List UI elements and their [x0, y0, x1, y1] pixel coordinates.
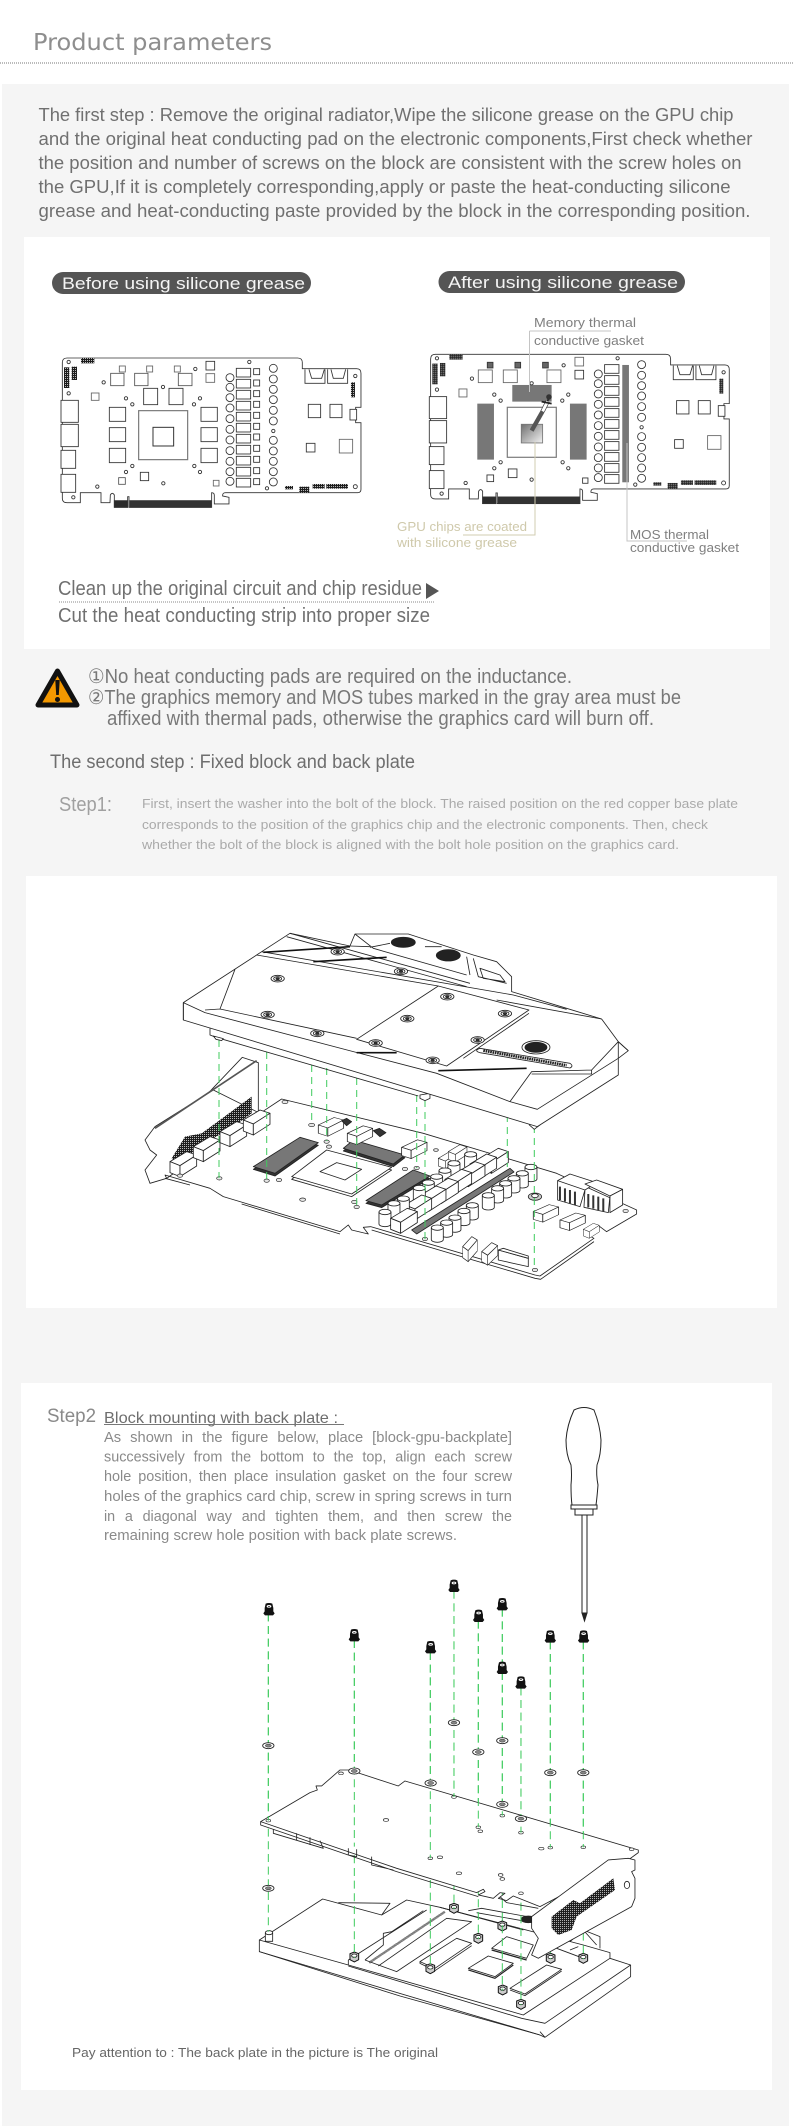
- screws: [263, 1580, 589, 1689]
- arrow: next action triangle: [426, 583, 439, 599]
- power connectors: [463, 1174, 623, 1267]
- text block: warning notes: ①No heat conducting pads are required on the inductance.: [88, 666, 572, 688]
- note: pay attention: Pay attention to : The back plate in the picture is The original: [72, 2045, 438, 2060]
- alignment guides: lower dashed lines: [268, 1591, 583, 2005]
- text block: warning notes: affixed with thermal pads, otherwise the graphics card will burn off.: [107, 708, 654, 730]
- heading: second step: The second step : Fixed block and back plate: [50, 752, 415, 773]
- text block: first step instructions: [38, 104, 752, 221]
- callout: MOS thermal conductive gasket: conductive gasket: [630, 541, 740, 555]
- GPU chip coated with grease: [521, 424, 543, 443]
- MOS and capacitor rows: [379, 1148, 537, 1242]
- callout: memory thermal conductive gasket: Memory thermal: [534, 316, 636, 330]
- thermal strip hatch: [369, 1912, 445, 1963]
- callout: GPU chips coated with silicone grease: GPU chips are coated: [397, 520, 527, 534]
- heading: Product parameters: Product parameters: [33, 30, 272, 56]
- text block: step 1 description: First, insert the washer into the bolt of the block. The raised position on the red copper base plate: [142, 796, 738, 811]
- washers: [263, 1720, 589, 1891]
- diagram: circuit board before grease: [61, 358, 361, 507]
- illustration: lower water block: [259, 1899, 631, 2037]
- callout: GPU chips coated with silicone grease: with silicone grease: [396, 536, 517, 550]
- callout: MOS thermal conductive gasket: [627, 443, 740, 555]
- board mounting holes: [177, 1100, 628, 1272]
- card surface holes: [266, 1772, 634, 1895]
- text block: step 2 instructions: As shown in the figure below, place [block-gpu-backplate]: [104, 1429, 512, 1446]
- ports: [391, 937, 550, 1054]
- text block: first step instructions: the GPU,If it is completely corresponding,apply or paste the heat-conducting silicone: [38, 176, 730, 197]
- panel: block installation illustration: [26, 876, 777, 1308]
- diagram: circuit board after grease with gaskets: [429, 354, 729, 504]
- black accent strips: [263, 947, 527, 1071]
- board outline: [165, 1099, 637, 1276]
- logo slot: [477, 1048, 572, 1068]
- spring screws and washers: [263, 1580, 589, 1891]
- badge: after using silicone grease: After using silicone grease: [448, 273, 678, 292]
- text: cut the heat conducting strip: Cut the heat conducting strip into proper size: [58, 605, 430, 627]
- memory thermal gaskets: [477, 365, 629, 482]
- badge: after using silicone grease: [438, 271, 685, 293]
- icon: syringe of silicone grease: [532, 395, 552, 431]
- I/O bracket: [145, 1057, 260, 1183]
- text block: step 2 instructions: remaining screw hole position with back plate screws.: [104, 1527, 457, 1544]
- heading: block mounting with back plate: Block mounting with back plate :: [104, 1410, 338, 1427]
- standoffs: [210, 1028, 540, 1129]
- cover plate: [357, 986, 529, 1066]
- text block: first step instructions: the position and number of screws on the block are consistent with the screw holes on: [38, 152, 742, 173]
- alignment guides: upper dashed lines over card: [268, 1591, 583, 1858]
- text: clean up the original circuit: Clean up the original circuit and chip residue: [58, 578, 422, 600]
- text block: first step instructions: and the original heat conducting pad on the electronic components,First check whether: [38, 128, 752, 149]
- alignment guides: green dashed lines to the block: [219, 1040, 534, 1270]
- text block: step 2 instructions: [104, 1429, 512, 1544]
- I/O bracket: [532, 1858, 635, 1958]
- label: step 2: Step2: [47, 1406, 96, 1427]
- illustration: graphics card board: [145, 1057, 637, 1279]
- text block: step 2 instructions: hole position, then place insulation gasket on the four screw: [104, 1468, 512, 1485]
- callout: memory thermal conductive gasket: conductive gasket: [534, 334, 645, 348]
- text block: step 1 description: whether the bolt of the block is aligned with the bolt hole position on the graphics card.: [141, 837, 679, 852]
- text block: first step instructions: grease and heat-conducting paste provided by the block in the corresponding position.: [38, 200, 750, 221]
- text block: step 2 instructions: holes of the graphics card chip, screw in spring screws in turn: [104, 1488, 512, 1505]
- icon: warning triangle: [38, 671, 77, 705]
- text block: step 2 instructions: successively from the bottom to the top, align each screw: [104, 1449, 512, 1466]
- illustration: water block: [183, 933, 628, 1129]
- text block: first step instructions: The first step : Remove the original radiator,Wipe the silicone grease on the GPU chip: [38, 104, 734, 125]
- memory pads and GPU: [253, 1137, 430, 1208]
- illustration: graphics card with back plate: [261, 1770, 638, 1958]
- text block: step 1 description: corresponds to the position of the graphics chip and the electronic components. Then, check: [142, 817, 709, 832]
- label: step 1: Step1:: [59, 794, 112, 816]
- text block: step 1 description: [141, 796, 738, 852]
- callout: memory thermal conductive gasket: [530, 316, 645, 392]
- small components near GPU: [318, 1117, 467, 1169]
- text block: warning notes: [88, 666, 681, 730]
- badge: before using silicone grease: Before using silicone grease: [62, 274, 305, 293]
- block body: [183, 933, 628, 1127]
- block screws: [261, 948, 512, 1064]
- lower mounting nuts: [265, 1903, 588, 2009]
- text block: warning notes: ②The graphics memory and MOS tubes marked in the gray area must be: [88, 687, 681, 709]
- icon: screwdriver: [566, 1408, 601, 1621]
- I/O connectors: [170, 1110, 270, 1177]
- block edges and surface panels: [183, 933, 628, 1109]
- callout: GPU chips coated with silicone grease: [396, 442, 535, 550]
- callout: MOS thermal conductive gasket: MOS thermal: [630, 528, 709, 542]
- panel: back plate mounting: [21, 1383, 772, 2090]
- card body: [261, 1770, 638, 1907]
- text block: step 2 instructions: in a diagonal way and tighten them, and then screw the: [104, 1508, 512, 1525]
- pads and GPU contact: [420, 1908, 562, 1996]
